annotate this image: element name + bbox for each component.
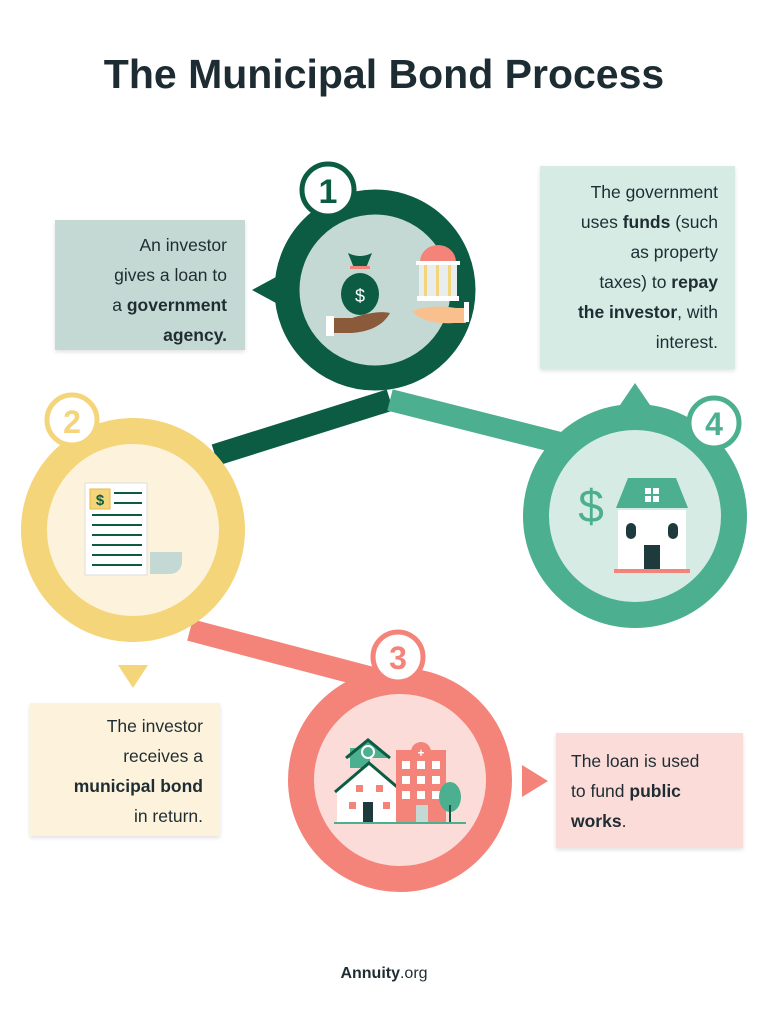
- badge 1: 1: [319, 173, 337, 211]
- circle 1: [287, 202, 469, 378]
- badge 2: 2: [63, 404, 81, 440]
- icon: dollar house: [578, 478, 690, 573]
- text box 4: [540, 166, 735, 369]
- text box 3: [556, 733, 743, 848]
- circle 2: [34, 431, 232, 629]
- text box 2: [30, 703, 220, 836]
- text box 2: The investor: [107, 716, 203, 736]
- icon: money bag hand: $: [355, 286, 365, 306]
- badge 2: [47, 395, 97, 445]
- text box 4: uses funds (such: [581, 212, 718, 232]
- text box 4: as property: [630, 242, 718, 262]
- badge 4: 4: [705, 406, 723, 442]
- text box 2: receives a: [123, 746, 203, 766]
- arrow: box3 pointer: [522, 765, 548, 797]
- icon: public works buildings: +: [417, 746, 425, 760]
- text box 4: the investor, with: [578, 302, 718, 322]
- connector lines: [190, 400, 580, 680]
- text box 4: interest.: [656, 332, 718, 352]
- text box 3: The loan is used: [571, 751, 699, 771]
- icon: dollar house: $: [578, 480, 604, 532]
- badge 3: [373, 632, 423, 682]
- text box 2: municipal bond: [74, 776, 203, 796]
- icon: money bag hand: [326, 253, 390, 336]
- arrow: box4 pointer: [620, 383, 650, 405]
- footer logo: Annuity.org: [340, 965, 428, 982]
- text box 3: to fund public: [571, 781, 681, 801]
- text box 4: The government: [591, 182, 718, 202]
- text box 2: in return.: [134, 806, 203, 826]
- text box 1: gives a loan to: [114, 265, 227, 285]
- text box 1: a government: [112, 295, 227, 315]
- badge 4: [689, 398, 739, 448]
- circle 4: [536, 417, 734, 615]
- arrow: box2 pointer: [118, 665, 148, 688]
- icon: public works buildings: [334, 740, 466, 823]
- text box 4: taxes) to repay: [599, 272, 718, 292]
- icon: courthouse hand: [412, 245, 469, 323]
- text box 3: works.: [571, 811, 626, 831]
- circle 3: [301, 681, 499, 879]
- text box 1: [55, 220, 245, 350]
- text box 1: agency.: [163, 325, 227, 345]
- title: The Municipal Bond Process: [104, 51, 664, 97]
- text box 1: An investor: [139, 235, 227, 255]
- icon: bond document: [85, 483, 182, 575]
- arrow: box1 pointer: [252, 277, 276, 303]
- badge 3: 3: [389, 640, 407, 676]
- badge 1: [302, 164, 354, 216]
- icon: bond document: $: [96, 492, 105, 509]
